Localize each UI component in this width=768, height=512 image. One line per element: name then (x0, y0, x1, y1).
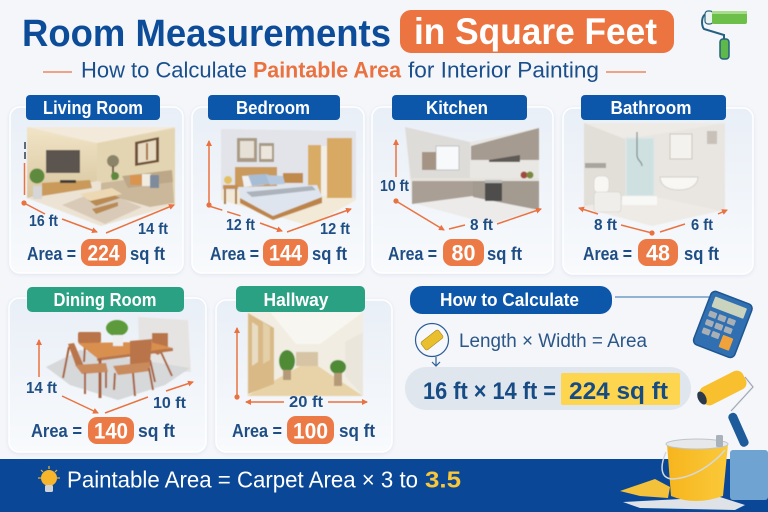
worked example (405, 367, 691, 410)
bedroom area: sq ft (312, 244, 347, 264)
dining room illustration (46, 317, 191, 400)
panel: bedroom: 12 ft (226, 217, 255, 234)
dining room area: sq ft (138, 421, 175, 441)
bedroom illustration (221, 129, 356, 226)
living room title (26, 95, 160, 120)
hallway area: Area = (232, 421, 282, 441)
kitchen area (388, 239, 522, 266)
icon: tape measure (416, 324, 448, 366)
how to calculate heading (410, 286, 612, 314)
bedroom title: Bedroom (236, 98, 310, 118)
panel: dining room: 14 ft (26, 380, 57, 397)
dining room title (27, 287, 184, 312)
kitchen title (392, 95, 527, 120)
dining room area: Area = (31, 421, 82, 441)
kitchen area: sq ft (487, 244, 522, 264)
panel: how to calculate (405, 286, 709, 410)
hallway title (236, 286, 365, 312)
icon: yellow paint roller (695, 368, 753, 448)
panel: kitchen: 10 ft (380, 178, 409, 195)
panel: dining room: 10 ft (153, 395, 186, 412)
living room title: Living Room (43, 98, 143, 118)
panel: bathroom: 6 ft (691, 217, 713, 234)
hallway area: 100 (293, 418, 328, 444)
bathroom area (583, 239, 719, 266)
dining room area (31, 417, 175, 444)
kitchen title: Kitchen (426, 98, 488, 118)
bathroom area: 48 (646, 240, 670, 266)
subtitle: for Interior Painting (408, 58, 599, 82)
subtitle: Paintable Area (253, 58, 402, 82)
hallway dimension arrow (246, 401, 367, 403)
panel: bedroom: 12 ft (320, 221, 350, 238)
subtitle: How to Calculate (81, 58, 247, 82)
bathroom dimension arrows (579, 208, 727, 236)
icon: calculator (692, 290, 754, 359)
icon: light bulb (38, 466, 60, 492)
panel: dining room (9, 287, 206, 452)
living room illustration (27, 127, 175, 226)
dining room dimension arrows (39, 340, 193, 413)
kitchen dimension arrows (396, 140, 541, 230)
footer band (0, 459, 768, 512)
panel: hallway: 20 ft (289, 394, 323, 411)
panel: hallway (216, 286, 392, 452)
title: Room Measurements (22, 13, 391, 55)
footer band: Paintable Area = Carpet Area × 3 to (67, 466, 418, 492)
bathroom illustration (584, 123, 725, 226)
panel: kitchen: 8 ft (470, 217, 493, 234)
worked example: 16 ft × 14 ft = (423, 378, 556, 405)
icon: green paint roller (702, 11, 747, 59)
title (22, 10, 674, 55)
panel: living room: 16 ft (29, 213, 58, 230)
dining room area: 140 (94, 418, 128, 444)
bedroom area (210, 239, 347, 266)
panel: bathroom: 8 ft (594, 217, 617, 234)
bedroom dimension arrows (209, 206, 351, 232)
living room area: Area = (27, 244, 76, 264)
formula: Length × Width = Area (459, 331, 647, 352)
how to calculate heading: How to Calculate (440, 290, 579, 310)
bedroom area: 144 (269, 240, 303, 266)
bedroom title (208, 95, 340, 120)
kitchen area: 80 (452, 240, 476, 266)
bathroom area: Area = (583, 244, 632, 264)
panel: living room: 14 ft (138, 221, 168, 238)
kitchen area: Area = (388, 244, 437, 264)
title: in Square Feet (414, 11, 657, 52)
bathroom title: Bathroom (610, 98, 692, 118)
worked example: 224 sq ft (569, 378, 668, 405)
hallway illustration (247, 312, 363, 396)
footer band: 3.5 (425, 466, 461, 492)
bathroom area: sq ft (684, 244, 719, 264)
hallway title: Hallway (264, 290, 328, 310)
panel: bedroom (192, 95, 364, 273)
bathroom title (581, 95, 726, 120)
kitchen illustration (405, 127, 539, 224)
dining room title: Dining Room (54, 290, 156, 310)
subtitle (43, 58, 646, 82)
bedroom area: Area = (210, 244, 259, 264)
panel: bathroom (563, 95, 753, 274)
icon: paint buckets and tray (620, 435, 768, 510)
hallway area: sq ft (339, 421, 375, 441)
living room area: 224 (88, 240, 120, 266)
living room area (27, 239, 165, 266)
panel: living room (10, 95, 183, 273)
width dimension arrows (24, 203, 174, 233)
living room area: sq ft (130, 244, 165, 264)
panel: kitchen (372, 95, 553, 273)
hallway area (232, 416, 375, 444)
